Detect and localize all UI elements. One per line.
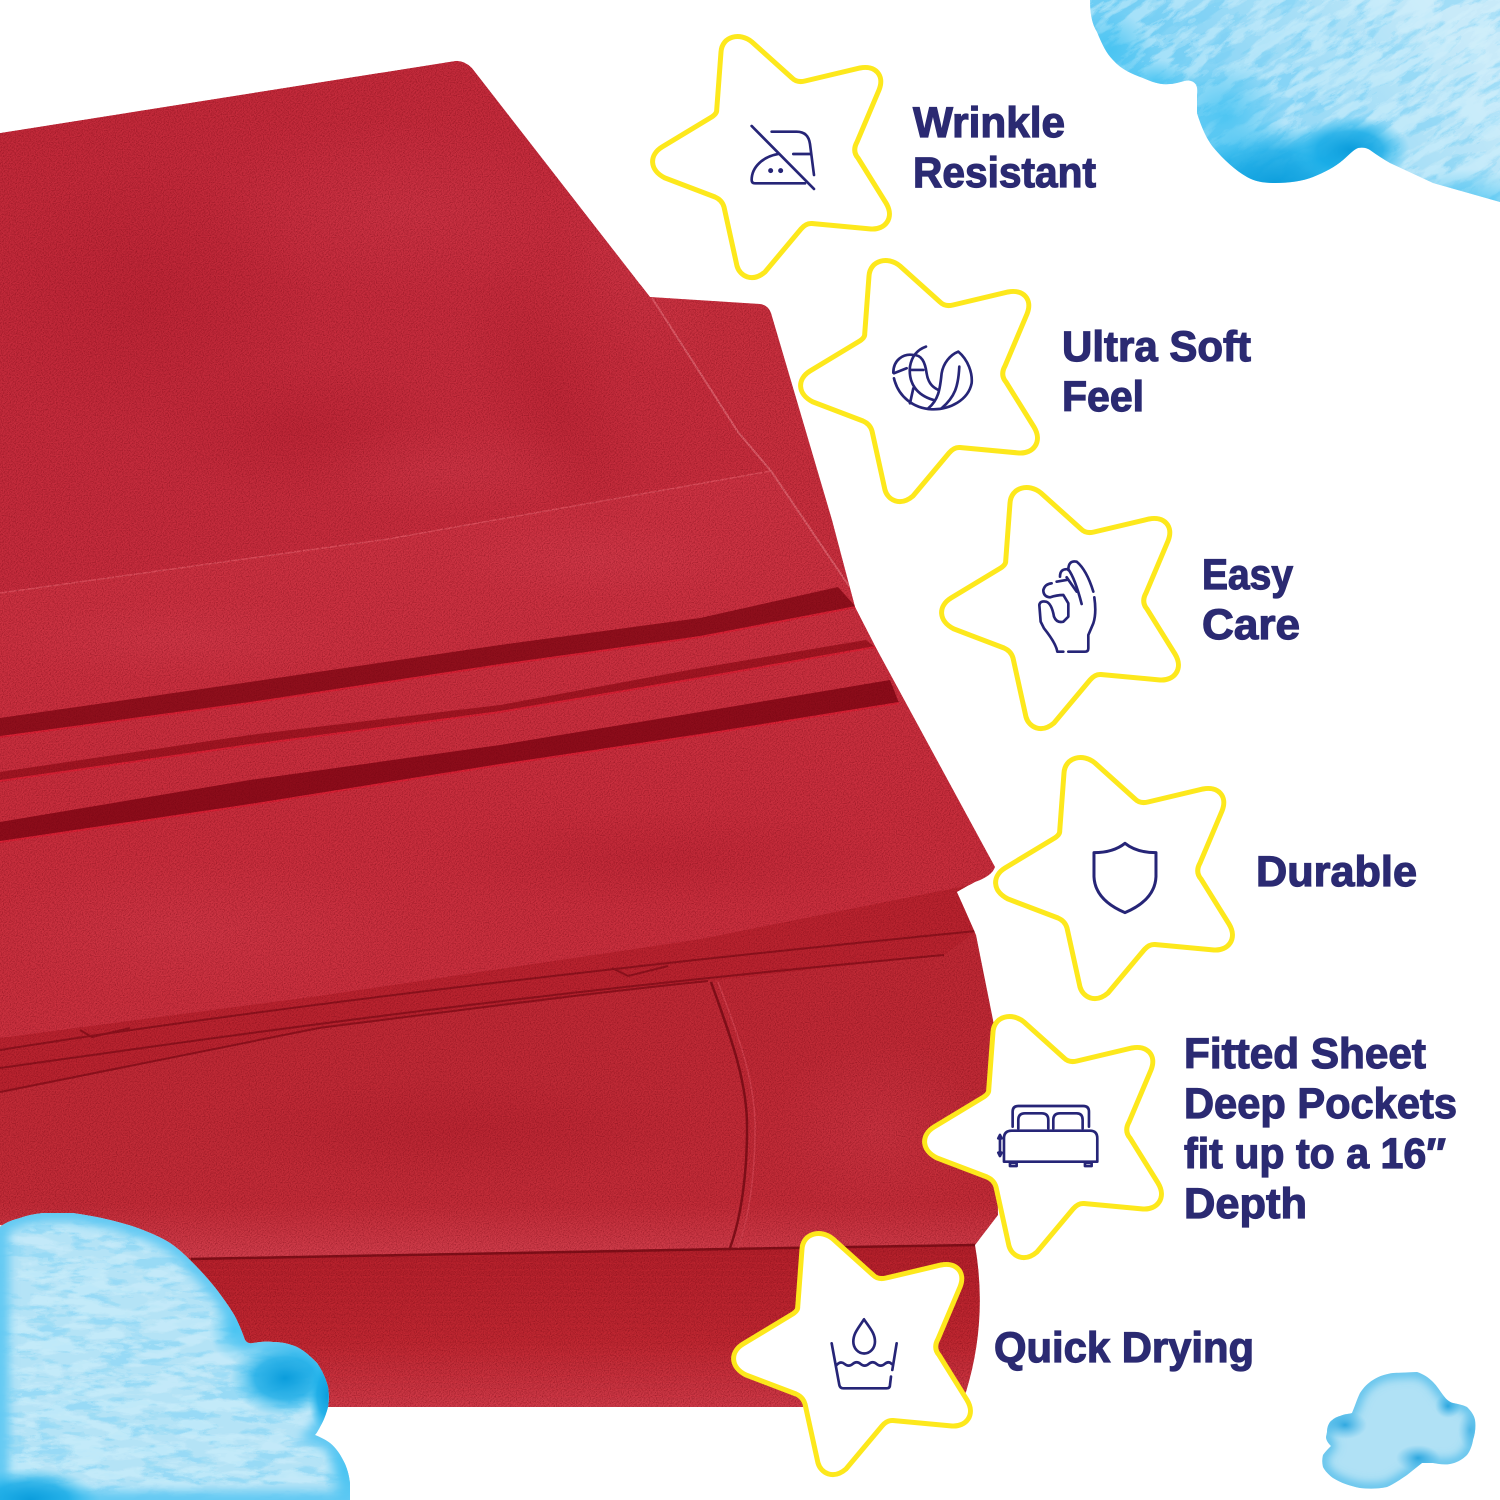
label [1202,551,1300,649]
star badge [801,261,1037,502]
pillowcase fold highlight [652,298,849,586]
bottom sheet woven rows [194,1256,980,1390]
soft fabric shading [588,218,884,1134]
feature: durable [996,758,1417,999]
label: Wrinkle [913,99,1065,147]
label [1184,1030,1457,1228]
embroidered stripes [0,587,899,842]
cuff top stitched seam [0,471,771,593]
label: Fitted Sheet [1184,1030,1426,1078]
bright stitch lines [0,607,899,842]
icon: bed [998,1106,1097,1166]
cloud base wash [0,1205,355,1500]
label: Durable [1256,848,1417,896]
cloud base wash [1080,0,1500,210]
star badge [653,37,889,278]
cloud edge colour [1322,1372,1475,1489]
fold wrinkle lines [0,922,976,1092]
star badge [925,1017,1161,1258]
label: Deep Pockets [1184,1080,1457,1128]
cloud deep blue edges [1328,1396,1476,1469]
fabric weave texture [0,0,1000,1410]
brush stroke texture [1090,0,1500,201]
feature: easy care [942,488,1300,729]
stripe one [0,587,856,737]
icon: water drop over basin [832,1319,897,1388]
front pillowcase cuff [0,471,1000,1038]
cloud deep blue edges [1094,16,1500,202]
back pillowcase layer [640,285,880,660]
label: Ultra Soft [1062,323,1251,371]
cloud edge colour [0,1213,350,1500]
icon: ok hand [1039,561,1095,652]
fabric grain [0,0,1000,1410]
bottom folded sheet layer [187,1240,980,1407]
star badge [734,1234,970,1475]
label [1062,323,1251,421]
feature: quick drying [734,1234,1254,1475]
stripe two thin [0,640,875,781]
cloud base wash [1322,1372,1476,1489]
label: fit up to a 16″ [1184,1130,1446,1178]
star badge [996,758,1232,999]
cloud: small bottom right [1322,1372,1476,1489]
label: Depth [1184,1180,1307,1228]
icon: shield [1094,843,1156,913]
cloud: bottom left [0,1205,367,1500]
label: Easy [1202,551,1293,599]
hem seam on middle sheet [711,982,755,1248]
middle flat sheet layer [0,900,1000,1258]
watercolour texture [6,1216,337,1492]
crease shadow between layers [191,1245,975,1259]
stripe three [0,680,899,842]
label: Feel [1062,373,1144,421]
cloud: top right [1090,0,1500,202]
label: Resistant [913,149,1096,197]
label [913,99,1096,197]
cloud deep blue edges [0,1298,367,1500]
front pillowcase body [0,61,771,593]
label: Care [1202,601,1300,649]
feature: wrinkle resistant [653,37,1096,278]
label: Quick Drying [994,1324,1254,1372]
icon: feather [893,347,972,409]
photo: folded red bed sheets [0,0,1000,1410]
star badge [942,488,1178,729]
feature: fitted sheet deep pockets [925,1017,1457,1258]
folded edges layer [766,870,994,932]
feature: ultra soft feel [801,261,1251,502]
icon: crossed iron [752,126,814,189]
